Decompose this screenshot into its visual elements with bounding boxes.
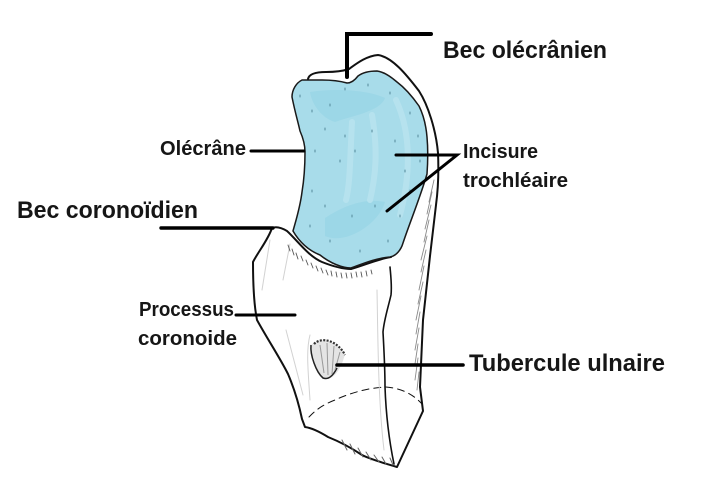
label: Incisure trochleaire: trochléaire — [463, 170, 568, 192]
label: Processus coronoide: Processus — [139, 299, 234, 321]
label: Olecrane: Olécrâne — [160, 138, 246, 160]
tubercle ulnaire marking — [311, 340, 345, 379]
blue articular surface: incisure trochleaire — [292, 71, 428, 268]
label: Processus coronoide: coronoide — [138, 328, 237, 350]
label: Bec coronoidien: Bec coronoïdien — [17, 197, 198, 224]
label: Bec olecranien: Bec olécrânien — [443, 37, 607, 64]
label: Incisure trochleaire: Incisure — [463, 141, 538, 163]
label: Tubercule ulnaire: Tubercule ulnaire — [469, 350, 665, 377]
leader lines — [161, 34, 463, 365]
bone: outer outline — [253, 55, 438, 467]
